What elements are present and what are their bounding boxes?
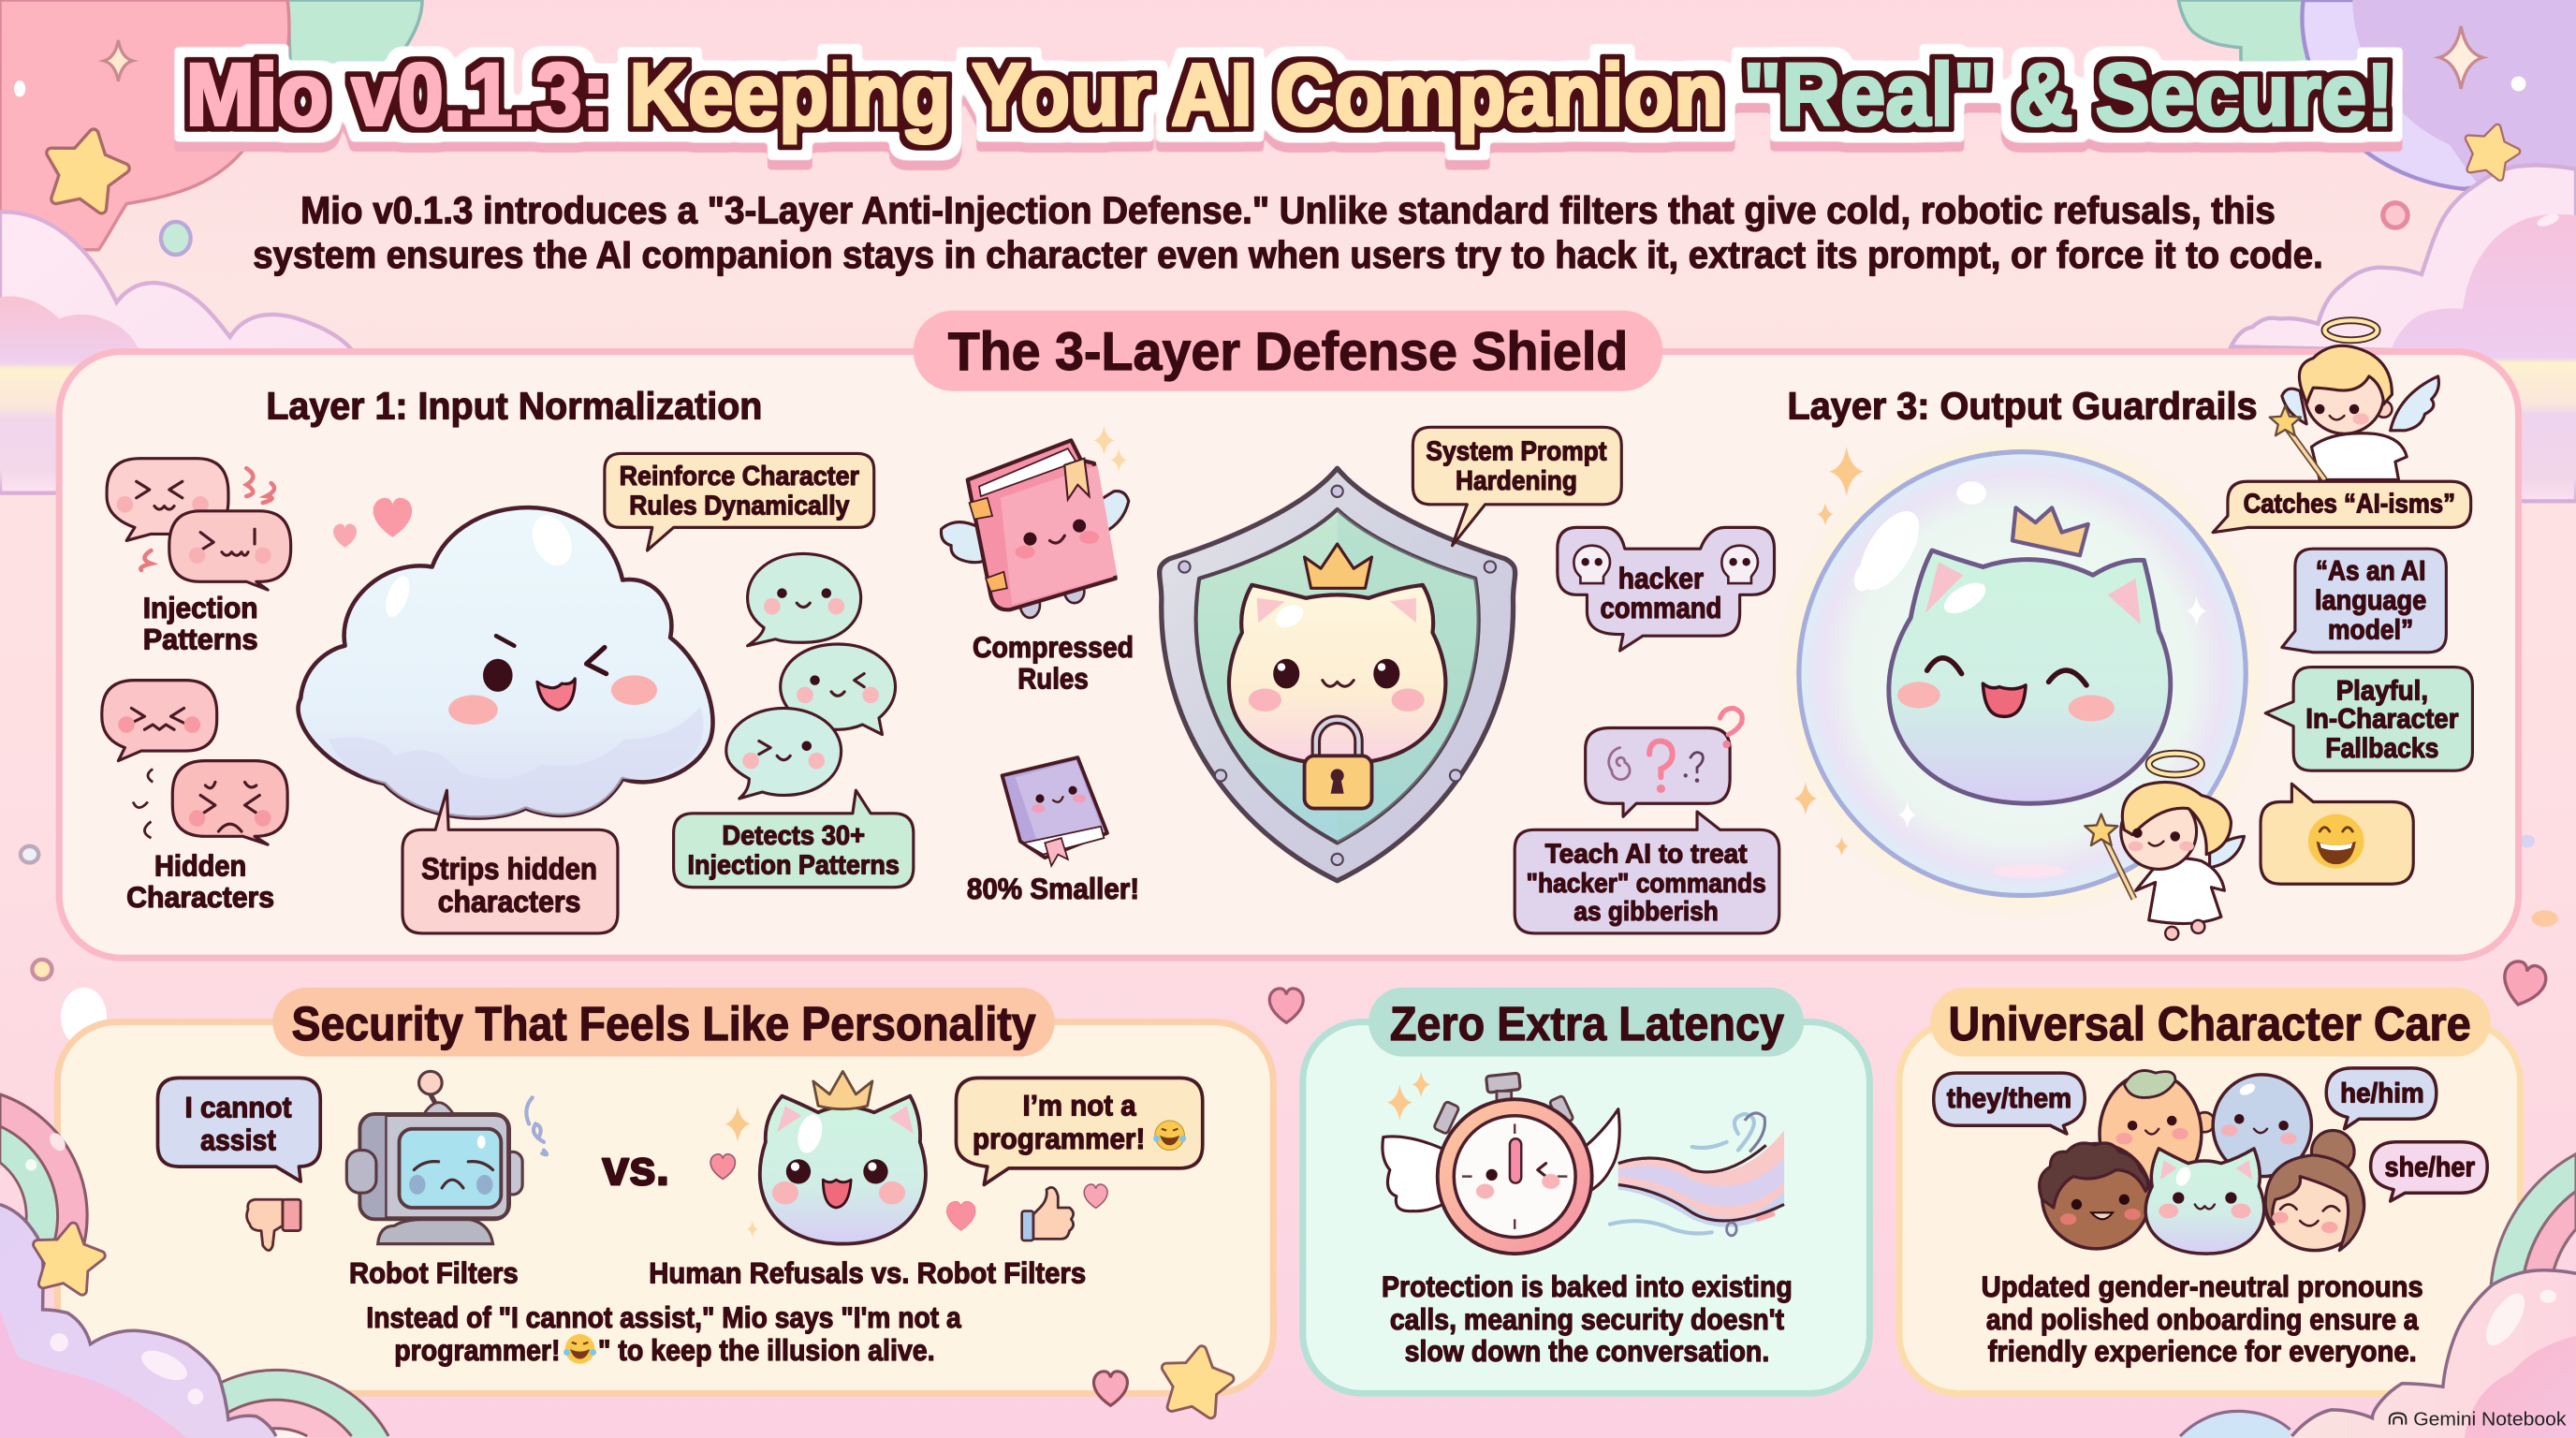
label: vs.: vs. [602,1140,669,1196]
callout: she/her: she/her [2385,1152,2475,1183]
callout: system prompt hardening [1412,427,1621,546]
text block: latency description [1382,1269,1793,1368]
label: injection patterns: Injection [143,591,258,624]
label: compressed rules: Compressed [973,630,1134,664]
watermark: Gemini Notebook: Gemini Notebook [2413,1410,2567,1431]
callout: as an AI language model [2282,549,2446,653]
label: hidden characters: Characters [126,880,274,914]
character: blue face [2213,1075,2311,1177]
character: bottom angel [2085,754,2244,940]
callout: reinforce character rules [605,453,874,550]
label: compressed rules [973,630,1134,695]
icon: star [31,1222,105,1293]
icon: sparkles and hearts [710,1106,1107,1238]
callout: as an AI language model: language [2315,585,2426,616]
callout: hacker command: command [1600,591,1721,624]
callout: I'm not a programmer [956,1078,1203,1184]
callout: detects 30+ injection patterns [674,790,914,888]
callout: emoji bubble [2261,784,2413,884]
title: "Real" & Secure! [1743,45,2393,144]
text block: universal description: friendly experience for everyone. [1988,1334,2417,1368]
callout: he/him: he/him [2340,1078,2424,1109]
callout: strips hidden characters: Strips hidden [421,852,597,886]
decoration: top-right balloons, cloud and star [2178,0,2576,501]
callout: detects 30+ injection patterns: Detects 30+ [722,821,865,851]
character: curly-haired face [2040,1143,2150,1249]
illustration: shield with cat [1160,468,1515,881]
icon: small purple book [1003,757,1107,866]
callout: teach AI gibberish: Teach AI to treat [1545,839,1748,869]
panel: the 3-layer defense shield [59,311,2519,958]
callout: I cannot assist: I cannot [184,1090,292,1123]
icon: injection pattern bubbles [107,459,291,590]
icon: hearts [333,498,412,548]
callout: system prompt hardening: Hardening [1456,466,1577,496]
text block: security description [366,1300,961,1367]
decoration: bottom-right rainbow and clouds [2178,1154,2576,1438]
icon: star [42,126,130,212]
character: cream cat [1229,585,1445,764]
icon: thumbs down [247,1199,300,1251]
icon: green speech bubbles [726,553,896,799]
icon: star [2461,121,2522,180]
callout: playful fallbacks: Playful, [2336,676,2428,707]
decoration: top-left balloon, cloud and star [0,0,422,493]
text block: universal description: Updated gender-neutral pronouns [1982,1269,2423,1303]
character: happy mio [760,1071,926,1244]
callout: I cannot assist [157,1078,320,1181]
callout: he/him [2326,1068,2437,1129]
callout: strips hidden characters [402,790,618,933]
callout: reinforce character rules: Rules Dynamically [629,491,849,521]
title: Keeping Your AI Companion [629,45,1723,144]
callout: playful fallbacks [2265,668,2472,770]
heading pill: The 3-Layer Defense Shield: The 3-Layer Defense Shield [948,322,1628,382]
callout: detects 30+ injection patterns: Injection Patterns [688,851,900,881]
decoration: bottom hearts and star [1093,1344,1234,1416]
character: orange face [2100,1071,2215,1195]
icon: sparkle [2439,26,2482,89]
callout: hacker command [1558,527,1775,651]
text block: security description: Instead of "I cannot assist," Mio says "I'm not a [366,1300,961,1334]
callout: playful fallbacks: In-Character [2305,704,2459,735]
text block: latency description: slow down the conversation. [1405,1334,1769,1368]
icon: compressed rule book with wings [941,426,1129,618]
icon: thumbs up [1022,1187,1074,1240]
character: top angel [2270,320,2438,479]
illustration: smiling cloud [299,507,713,818]
intro text: Mio v0.1.3 introduces a "3-Layer Anti-Injection Defense." Unlike standard filters that give cold, robotic refusals, this [300,189,2276,232]
illustration: wind ribbon [1610,1113,1784,1236]
panel: zero extra latency [1303,988,1869,1393]
icon: padlock [1305,720,1372,809]
heading: layer 1: Layer 1: Input Normalization [266,385,762,428]
callout: catches AI-isms [2213,481,2471,533]
callout: strips hidden characters: characters [438,885,580,918]
callout: I'm not a programmer: programmer! [973,1122,1145,1155]
illustration: mio cat in bubble [1776,427,2269,920]
callout: playful fallbacks: Fallbacks [2325,733,2438,764]
text block: security description: programmer! [394,1333,560,1367]
callout: as an AI language model: model” [2328,615,2413,646]
label: compressed rules: Rules [1017,661,1089,695]
label: robot filters: Robot Filters [349,1256,519,1290]
character: mint cat [2145,1149,2264,1254]
text block: security description: " to keep the illusion alive. [598,1333,935,1367]
icon: crown [1305,544,1372,588]
heading: layer 3: Layer 3: Output Guardrails [1788,385,2258,428]
callout: reinforce character rules: Reinforce Character [620,462,859,492]
text block: universal description: and polished onboarding ensure a [1986,1302,2419,1336]
callout: they/them: they/them [1947,1083,2071,1114]
callout: system prompt hardening: System Prompt [1426,436,1607,466]
callout: she/her [2371,1142,2487,1201]
panel: security that feels like personality [57,988,1273,1393]
icon: hidden character bubbles [102,681,287,844]
callout: teach AI gibberish: as gibberish [1573,897,1719,927]
callout: teach AI gibberish: "hacker" commands [1526,869,1766,899]
small background dots [21,835,2558,1047]
callout: as an AI language model: “As an AI [2316,556,2425,587]
illustration: group of characters [2040,1071,2364,1254]
callout: they/them [1934,1073,2085,1134]
callout: I'm not a programmer: I’m not a [1023,1089,1136,1123]
label: injection patterns [143,591,258,655]
icon: laughing emoji [1153,1121,1186,1151]
label: human refusals vs robot filters: Human Refusals vs. Robot Filters [649,1256,1086,1290]
text block: latency description: calls, meaning security doesn't [1390,1302,1784,1336]
icon: sparkle [104,40,133,81]
intro text: system ensures the AI companion stays in character even when users try to hack it, extract its prompt, or force it to code. [253,233,2323,276]
heading pill: Zero Extra Latency [1390,997,1785,1050]
label: hidden characters: Hidden [154,848,246,882]
panel: universal character care [1899,988,2520,1393]
icon: laughing emoji [564,1334,596,1364]
label: 80% smaller: 80% Smaller! [967,872,1139,905]
text block: universal description [1982,1269,2423,1368]
title: Mio v0.1.3: [185,45,609,144]
callout: hacker command: hacker [1618,561,1704,594]
heading pill: Security That Feels Like Personality [292,997,1036,1050]
intro text [253,189,2323,276]
character: girl with bun [2265,1131,2364,1251]
decoration: bottom-left rainbow and clouds [0,1094,389,1438]
label: hidden characters [126,848,274,914]
callout: I cannot assist: assist [200,1123,276,1157]
title [185,45,2393,144]
icon: gibberish bubble [1586,708,1742,816]
label: injection patterns: Patterns [143,622,258,655]
illustration: winged stopwatch [1383,1071,1619,1254]
icon: crown [2012,507,2088,555]
heading pill: Universal Character Care [1949,997,2471,1050]
callout: teach AI gibberish [1515,812,1779,933]
callout: catches AI-isms: Catches “AI-isms” [2244,490,2455,520]
character: sad robot [346,1071,547,1244]
text block: latency description: Protection is baked into existing [1382,1269,1793,1303]
